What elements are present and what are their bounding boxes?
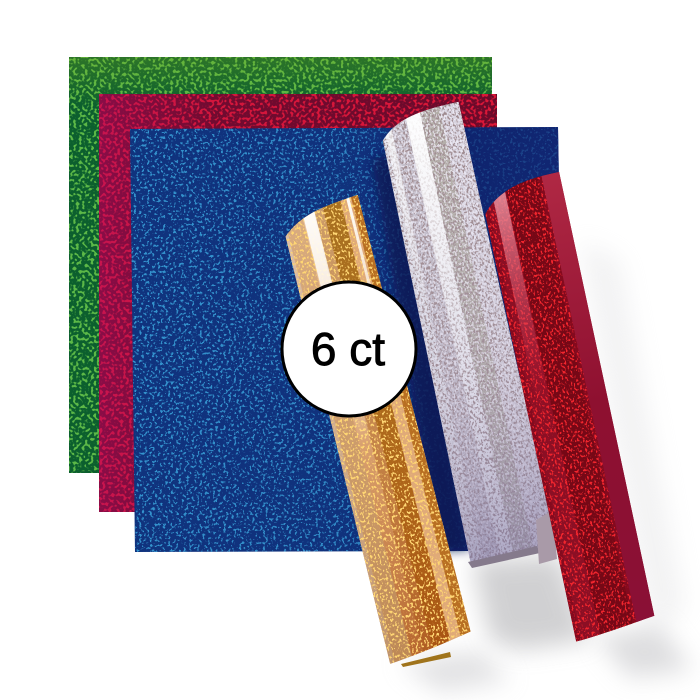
roll shadow on blue sheet [372, 150, 470, 552]
badge label: 6 ct: 6 ct [311, 323, 385, 375]
cast shadows on the white ground [400, 240, 692, 692]
silver roll folded end [468, 510, 557, 568]
sheet: red [99, 94, 497, 512]
roll: gold holographic [286, 194, 471, 664]
sheet: blue [130, 127, 560, 552]
sheet: green [69, 57, 492, 473]
roll: silver holographic [382, 102, 549, 562]
gold roll inner layer at bottom [401, 652, 451, 667]
count badge [282, 282, 416, 416]
roll: red holographic [485, 172, 654, 642]
